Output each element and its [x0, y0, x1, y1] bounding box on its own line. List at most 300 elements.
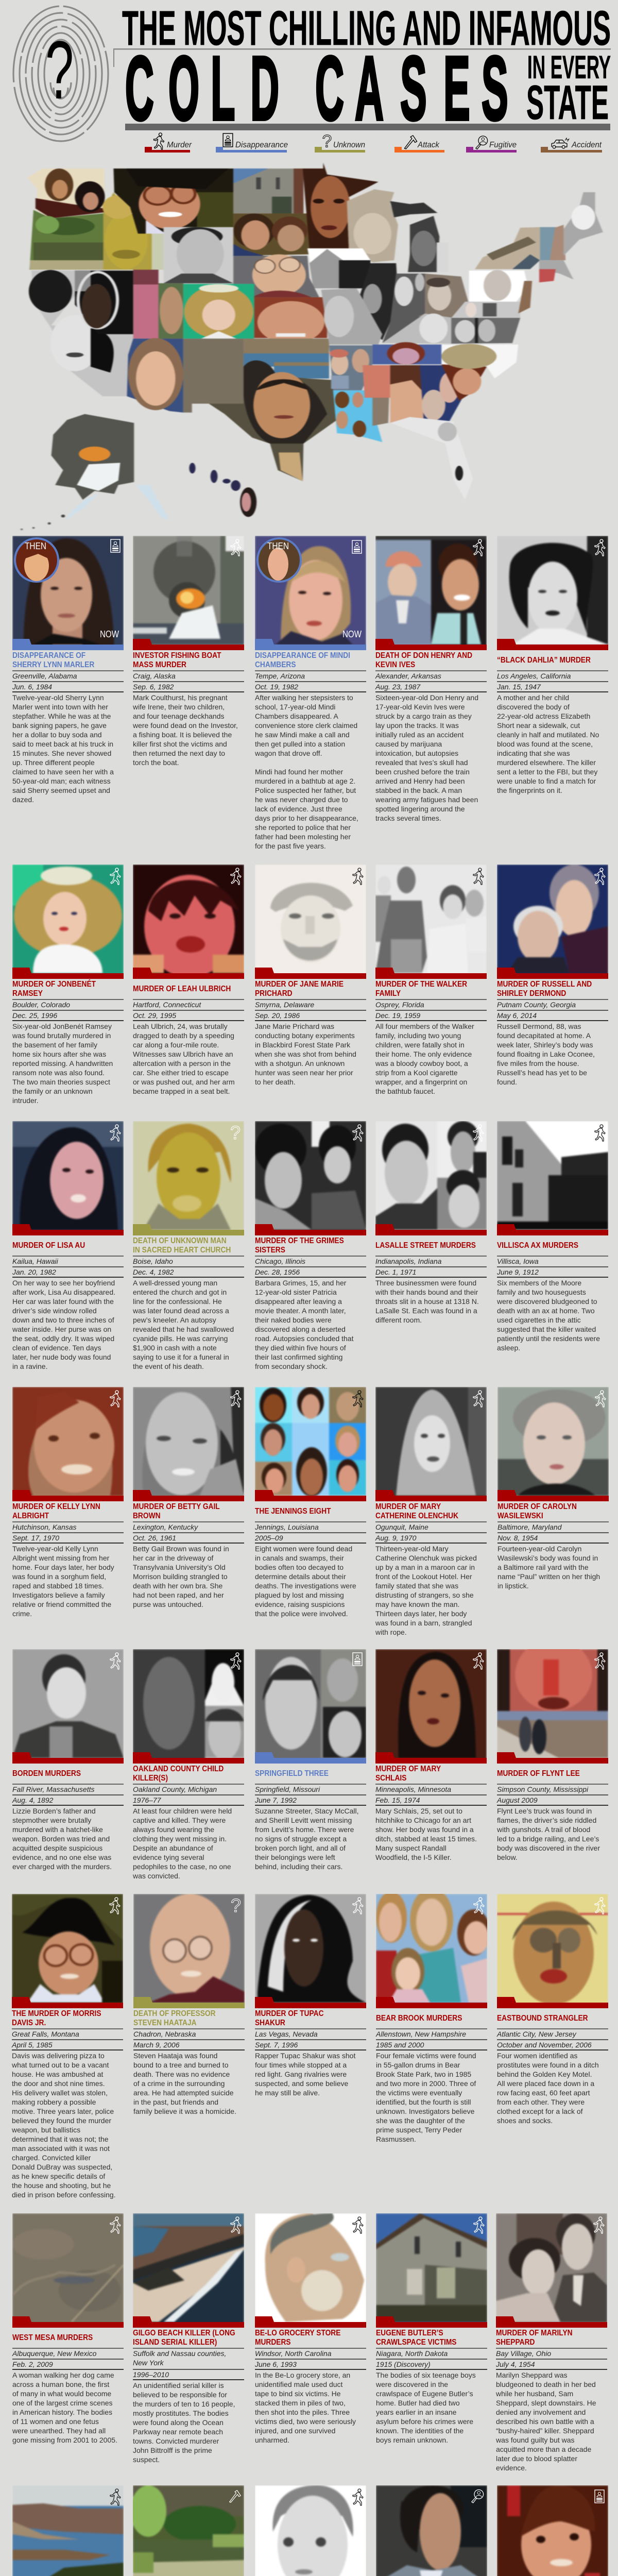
description: no signs of struggle except a — [255, 1835, 347, 1843]
date — [497, 682, 608, 692]
title: DISAPPEARANCE OF MINDI — [255, 651, 350, 659]
description: a Baltimore rail yard with the — [497, 1563, 589, 1571]
location: Chicago, Illinois — [255, 1257, 305, 1265]
location: Las Vegas, Nevada — [255, 2030, 318, 2038]
date — [375, 1795, 487, 1806]
card: Don Henry and Kevin Ives — [375, 536, 487, 822]
South Carolina — [441, 364, 487, 401]
title: PRICHARD — [255, 989, 293, 997]
description: stacked them in piles of two, — [255, 2399, 346, 2407]
date — [375, 1267, 487, 1278]
description: victims died, two were seriously — [255, 2417, 356, 2426]
card: Sacred Heart Church — [133, 1121, 244, 1370]
description: later due to blood splatter — [496, 2454, 577, 2463]
card: Eugene Butler — [376, 2213, 487, 2445]
description: bound to a tree and burned to — [133, 2061, 228, 2069]
location — [255, 2349, 366, 2360]
description: denied any involvement and — [496, 2408, 586, 2416]
location — [255, 1522, 366, 1533]
date — [12, 682, 124, 692]
card: Leah Ulbrich — [133, 865, 244, 1095]
photo: composite sketch — [255, 865, 366, 979]
description: lay upon the tracks. It was — [375, 721, 459, 730]
description: was convicted. — [133, 1872, 180, 1880]
description: torch the boat. — [133, 758, 179, 767]
description: bodies often too decayed to — [255, 1563, 344, 1571]
Indiana — [382, 274, 425, 343]
card: Cline Falls — [133, 2485, 244, 2576]
description: Jane Marie Prichard was — [255, 1022, 334, 1030]
title — [375, 979, 487, 1000]
description: After walking her stepsisters to — [255, 693, 353, 702]
description: clothing they went missing in. — [133, 1835, 227, 1843]
description: while her husband, Sam — [496, 2389, 573, 2398]
description: John Bittrolff is the prime — [133, 2446, 212, 2454]
location — [497, 1000, 608, 1011]
description: All were placed face down in a — [497, 2079, 594, 2088]
description: described his own battle with a — [496, 2417, 594, 2426]
title: MURDER OF THE GRIMES — [255, 1236, 344, 1245]
title — [12, 1235, 124, 1257]
location — [375, 1000, 487, 1011]
title: EUGENE BUTLER’S — [376, 2329, 443, 2337]
date — [12, 2040, 123, 2050]
date: May 6, 2014 — [497, 1011, 537, 1020]
location — [497, 1522, 609, 1533]
date — [375, 1011, 487, 1021]
description: row facing east, 60 feet apart — [497, 2089, 590, 2097]
description: area. He had attempted suicide — [133, 2089, 234, 2097]
description: became trapped in a seat belt. — [133, 1087, 230, 1095]
date: Dec. 19, 1959 — [375, 1011, 420, 1020]
date: April 5, 1985 — [12, 2041, 53, 2049]
title: IN SACRED HEART CHURCH — [133, 1246, 231, 1254]
title — [12, 650, 124, 671]
description: said to meet back at his truck in — [12, 740, 113, 748]
title — [255, 650, 366, 671]
description: Flynt Lee’s truck was found in — [497, 1807, 592, 1815]
card: Flynt Lee — [497, 1649, 608, 1862]
location: Greenville, Alabama — [12, 672, 77, 680]
description: Suzanne Streeter, Stacy McCall, — [255, 1807, 359, 1815]
description: spotted lingering around the — [375, 805, 465, 813]
description: Mindi had found her mother — [255, 768, 343, 776]
Alaska — [51, 414, 134, 500]
location — [497, 1785, 608, 1795]
description — [12, 1544, 124, 1618]
card: Boy in the Box — [255, 2485, 366, 2576]
description: always found wearing the — [133, 1825, 214, 1834]
title: SCHLAIS — [375, 1773, 406, 1783]
photo: then and now portrait: NOW — [100, 629, 119, 639]
date: August 2009 — [497, 1796, 538, 1804]
description: home six hours after she was — [12, 1050, 106, 1058]
New York — [475, 227, 540, 269]
location — [133, 1257, 244, 1267]
location: Simpson County, Mississippi — [497, 1785, 588, 1793]
description: Short near a sidewalk, cut — [497, 721, 580, 730]
legend: attack — [394, 135, 444, 152]
title — [375, 650, 487, 671]
date: Oct. 19, 1982 — [255, 683, 298, 691]
description — [255, 1806, 366, 1871]
location — [255, 1257, 366, 1267]
description: the seat, oddly dry. It was wiped — [12, 1334, 114, 1343]
description: Lizzie Borden’s father and — [12, 1807, 96, 1815]
card: Oakland County — [133, 1649, 244, 1880]
description — [375, 693, 478, 822]
photo: Tupac — [255, 1894, 366, 2008]
location — [133, 1000, 244, 1011]
description: An unidentified serial killer is — [133, 2381, 224, 2389]
icon: fingerprint with question mark — [13, 6, 108, 141]
description: patiently until the residents were — [497, 1334, 600, 1343]
card: Lawton — [12, 2485, 124, 2576]
date — [255, 2360, 366, 2370]
description: found. — [497, 1078, 517, 1086]
description: death. There was no evidence — [133, 2070, 230, 2078]
date: July 4, 1954 — [496, 2360, 535, 2368]
date — [133, 682, 244, 692]
description: death with an ax at home. Two — [497, 1307, 595, 1315]
description: the bathtub faucet. — [375, 1087, 435, 1095]
description: making robbery a possible — [12, 2098, 96, 2106]
location — [12, 1000, 124, 1011]
description: murdered with a hatchet-like — [12, 1825, 103, 1834]
description: cyanide pills. He was carrying — [133, 1334, 228, 1343]
location — [376, 2029, 487, 2040]
title — [497, 1235, 608, 1257]
description: tracks several times. — [375, 814, 441, 822]
description: a fishing boat. It is believed the — [133, 731, 232, 739]
card: Mary Catherine Olenchuk — [375, 1387, 487, 1637]
card: Betty Gail Brown — [133, 1387, 244, 1609]
description: caused by marijuana — [375, 740, 442, 748]
legend: disappearance: Disappearance — [235, 141, 288, 149]
description: evidence, raising suspicions — [255, 1600, 345, 1608]
title: DEATH OF DON HENRY AND — [375, 651, 472, 659]
date — [12, 1795, 124, 1806]
description: with rope. — [375, 1628, 407, 1636]
description: revealed that Ives’s skull had — [375, 758, 468, 767]
Oklahoma — [244, 338, 329, 379]
location: Boulder, Colorado — [12, 1001, 70, 1009]
card: Adam Emery — [376, 2485, 487, 2576]
date: March 9, 2006 — [133, 2041, 179, 2049]
photo: then and now portrait: THEN — [267, 541, 289, 551]
title: MURDER OF LISA AU — [12, 1241, 85, 1250]
description: family and two houseguests — [497, 1288, 586, 1296]
description: clean of evidence. Ten days — [12, 1344, 101, 1352]
description — [496, 2370, 607, 2472]
description: five miles from the house. — [497, 1059, 579, 1067]
date — [255, 2040, 366, 2050]
description: lack of evidence. Just three — [255, 805, 342, 813]
description: unidentified male used duct — [255, 2380, 342, 2388]
description: suggested that the killer waited — [497, 1325, 596, 1333]
card: JonBenet Ramsey — [12, 865, 124, 1105]
legend: unknown — [315, 131, 365, 152]
description: Six-year-old JonBenét Ramsey — [12, 1022, 112, 1030]
description: Parkway near remote beach — [133, 2428, 223, 2436]
description: up by a man in a maroon car in — [375, 1563, 475, 1571]
title: DEATH OF PROFESSOR — [133, 2009, 216, 2018]
card: Walker family — [375, 865, 487, 1095]
photo: aerial desert — [12, 2213, 124, 2328]
location — [133, 2349, 244, 2370]
location — [497, 671, 608, 682]
description: At least four children were held — [133, 1807, 232, 1815]
date: June 6, 1993 — [255, 2360, 297, 2368]
description: may have known the man. — [375, 1600, 459, 1608]
photo: Mary Catherine portrait — [375, 1387, 487, 1501]
title: MURDER OF FLYNT LEE — [497, 1769, 580, 1777]
description: across a human bone, the first — [12, 2380, 109, 2388]
map: photo collage of United States — [20, 163, 604, 531]
description: ever charged with the murders. — [12, 1862, 112, 1871]
title: STEVEN HAATAJA — [133, 2019, 197, 2027]
description: murdered in a bathtub at age 2. — [255, 777, 355, 785]
description: were discovered bludgeoned to — [497, 1297, 597, 1306]
description: Sixteen-year-old Don Henry and — [375, 693, 478, 702]
card: Jane Marie Prichard — [255, 865, 366, 1086]
description: Twelve-year-old Sherry Lynn — [12, 693, 104, 702]
description: tape to bind six victims. He — [255, 2389, 341, 2398]
description: in lipstick. — [497, 1582, 529, 1590]
description — [133, 693, 238, 767]
description: discovered along a deserted — [255, 1325, 346, 1333]
date — [133, 2370, 244, 2380]
photo: Carolyn portrait — [497, 1387, 609, 1501]
Illinois — [358, 263, 398, 340]
description: were unearthed. They had all — [12, 2427, 106, 2435]
description: struck by a cargo train as they — [375, 712, 472, 720]
location — [255, 1000, 366, 1011]
description — [375, 1022, 474, 1095]
location: Bay Village, Ohio — [496, 2349, 551, 2358]
location — [133, 1522, 244, 1533]
location — [375, 1522, 487, 1533]
location — [375, 1785, 487, 1795]
description: prime suspect, Terry Peder — [376, 2126, 462, 2134]
location: Jennings, Louisiana — [255, 1523, 319, 1531]
description: death with her own bra. She — [133, 1582, 222, 1590]
date — [12, 2360, 124, 2370]
description — [133, 2050, 245, 2116]
description: claimed to have seen her with a — [12, 768, 114, 776]
title — [133, 650, 244, 671]
date: Sep. 6, 1982 — [133, 683, 174, 691]
description: Barbara Grimes, 15, and her — [255, 1279, 346, 1287]
description: arrived and Henry had been — [375, 777, 465, 785]
title: MURDER OF THE WALKER — [375, 980, 467, 988]
photo: composite sketches — [133, 1649, 244, 1764]
North Carolina — [441, 345, 518, 379]
description: driver’s side window rolled — [12, 1307, 97, 1315]
title: CHAMBERS — [255, 660, 296, 669]
description: LaSalle St. Each was found in a — [375, 1307, 477, 1315]
card: Jennings Eight — [255, 1387, 366, 1618]
description: the house and shooting, but he — [12, 2181, 111, 2190]
title — [497, 1501, 609, 1522]
photo: lake landscape — [12, 2485, 124, 2576]
description: he saw Mindi make a call and — [255, 731, 350, 739]
title — [496, 2328, 607, 2349]
description: dazed. — [12, 795, 34, 804]
description — [133, 1022, 235, 1095]
card: West Mesa — [12, 2213, 124, 2445]
date — [497, 1533, 609, 1544]
description: been crushed before the train — [375, 768, 470, 776]
card: Mindi Chambers — [255, 536, 366, 850]
title — [133, 2008, 245, 2029]
title: CATHERINE OLENCHUK — [375, 1512, 458, 1520]
location — [133, 671, 244, 682]
description: distrusting of strangers, so she — [375, 1591, 474, 1599]
description: deaths. The investigations were — [255, 1582, 356, 1590]
Virginia — [451, 318, 520, 344]
Tennessee — [372, 345, 457, 364]
description: flames, the driver’s side riddled — [497, 1816, 596, 1824]
location: Indianapolis, Indiana — [375, 1257, 441, 1265]
title: SHEPPARD — [496, 2338, 535, 2346]
title: BROWN — [133, 1512, 161, 1520]
description: On her way to see her boyfriend — [12, 1279, 115, 1287]
photo: aerial beach — [133, 2213, 244, 2328]
location — [375, 671, 487, 682]
description: said Sherry seemed upset and — [12, 786, 110, 794]
description: days prior to her disappearance, — [255, 814, 358, 822]
location: Chadron, Nebraska — [133, 2030, 196, 2038]
description: stepfather. While he was at the — [12, 712, 111, 720]
date — [376, 2040, 487, 2050]
Idaho — [104, 192, 164, 269]
location: Tempe, Arizona — [255, 672, 305, 680]
description: behind, including their cars. — [255, 1862, 342, 1871]
title: SHIRLEY DERMOND — [497, 989, 566, 997]
title: MURDER OF MARY — [375, 1764, 441, 1773]
location — [12, 1522, 124, 1533]
Alabama — [390, 365, 424, 423]
title: KILLER(S) — [133, 1773, 168, 1783]
description: of a crime in the surrounding — [133, 2079, 225, 2088]
description: in American history. The bodies — [12, 2408, 112, 2416]
description: for the past five years. — [255, 842, 326, 850]
description: Donald DuBray was suspected, — [12, 2163, 112, 2171]
description: Three businessmen were found — [375, 1279, 476, 1287]
description: conducting botany experiments — [255, 1031, 355, 1040]
location — [496, 2349, 607, 2360]
date: 1915 (Discovery) — [376, 2360, 431, 2368]
icon: fingerprint with question mark: ? — [45, 24, 74, 116]
description: Sheppard, slept downstairs. He — [496, 2399, 596, 2407]
description: Transylvania University’s Old — [133, 1563, 226, 1571]
description: four times while stopped at a — [255, 2061, 347, 2069]
photo: Morris Davis — [12, 1894, 123, 2008]
description: in 55-gallon drums in Bear — [376, 2061, 460, 2069]
date — [255, 1795, 366, 1806]
description: intoxication, but autopsies — [375, 749, 458, 757]
photo: then and now portrait: THEN — [25, 541, 46, 551]
description — [255, 1544, 366, 1618]
photo: newsprint portraits — [255, 1649, 366, 1764]
title: RAMSEY — [12, 989, 43, 997]
legend: fugitive — [466, 136, 517, 152]
location: Osprey, Florida — [375, 1001, 424, 1009]
description: car. She either tried to escape — [133, 1069, 229, 1077]
Mississippi — [363, 365, 390, 426]
description: family, including two young — [375, 1031, 461, 1040]
title: GILGO BEACH KILLER (LONG — [133, 2329, 235, 2337]
description: Mark Coulthurst, his pregnant — [133, 693, 228, 702]
description — [12, 693, 114, 804]
photo: Lizzie Borden — [12, 1649, 124, 1764]
title: DAVIS JR. — [12, 2019, 46, 2027]
card: Black Dahlia — [497, 536, 608, 794]
description: with their hands bound and their — [375, 1288, 478, 1296]
description: their last confirmed sighting — [255, 1353, 342, 1361]
date: Sep. 20, 1986 — [255, 1011, 300, 1020]
title — [133, 1235, 244, 1257]
title — [497, 2008, 608, 2029]
description: asleep. — [497, 1344, 520, 1352]
description: clothed except for a lack of — [497, 2107, 583, 2115]
description: cleanly in half and mutilated. No — [497, 731, 599, 739]
location: Atlantic City, New Jersey — [497, 2030, 576, 2038]
photo: then and now portrait — [255, 536, 366, 650]
description — [497, 1278, 608, 1352]
location — [497, 2029, 608, 2040]
date — [133, 1533, 244, 1544]
date — [12, 1011, 124, 1021]
description: $1,900 in cash with a note — [133, 1344, 217, 1352]
date: Feb. 2, 2009 — [12, 2360, 53, 2368]
Hawaii — [189, 463, 196, 473]
date: Sept. 17, 1970 — [12, 1534, 59, 1542]
title: WEST MESA MURDERS — [12, 2333, 93, 2342]
description: were found along the Ocean — [133, 2418, 224, 2427]
description: Thirteen days later, her body — [375, 1609, 467, 1618]
description — [133, 1544, 244, 1609]
description: evidence. — [496, 2464, 527, 2472]
date: Dec. 1, 1971 — [375, 1268, 416, 1276]
description: was found in a sorghum field, — [12, 1572, 106, 1581]
title: VILLISCA AX MURDERS — [497, 1241, 578, 1250]
description: he may still be alive. — [255, 2089, 320, 2097]
location — [12, 2349, 124, 2360]
description: Brook State Park, two in 1985 — [376, 2070, 471, 2078]
description: the door and shot nine times. — [12, 2079, 105, 2088]
card: Springfield Three — [255, 1649, 366, 1871]
description: was found guilty but was — [496, 2436, 575, 2444]
description: different room. — [375, 1316, 422, 1324]
description: or was pushed out, and her arm — [133, 1078, 235, 1086]
description — [133, 1279, 234, 1370]
Maryland — [451, 301, 520, 318]
description — [12, 1279, 115, 1370]
description: gone missing from 2001 to 2005. — [12, 2436, 117, 2444]
title — [133, 1501, 244, 1522]
location: Allenstown, New Hampshire — [376, 2030, 466, 2038]
description: house. He was ambushed at — [12, 2070, 103, 2078]
description: and Sherill Levitt went missing — [255, 1816, 352, 1824]
description: unknown. Investigators believe — [376, 2107, 474, 2115]
description: intruder. — [12, 1096, 39, 1105]
legend: murder: Murder — [167, 141, 192, 149]
description: the basement of her family — [12, 1041, 97, 1049]
description: she reported to police that her — [255, 823, 351, 832]
description: wife Irene, their two children, — [133, 703, 225, 711]
